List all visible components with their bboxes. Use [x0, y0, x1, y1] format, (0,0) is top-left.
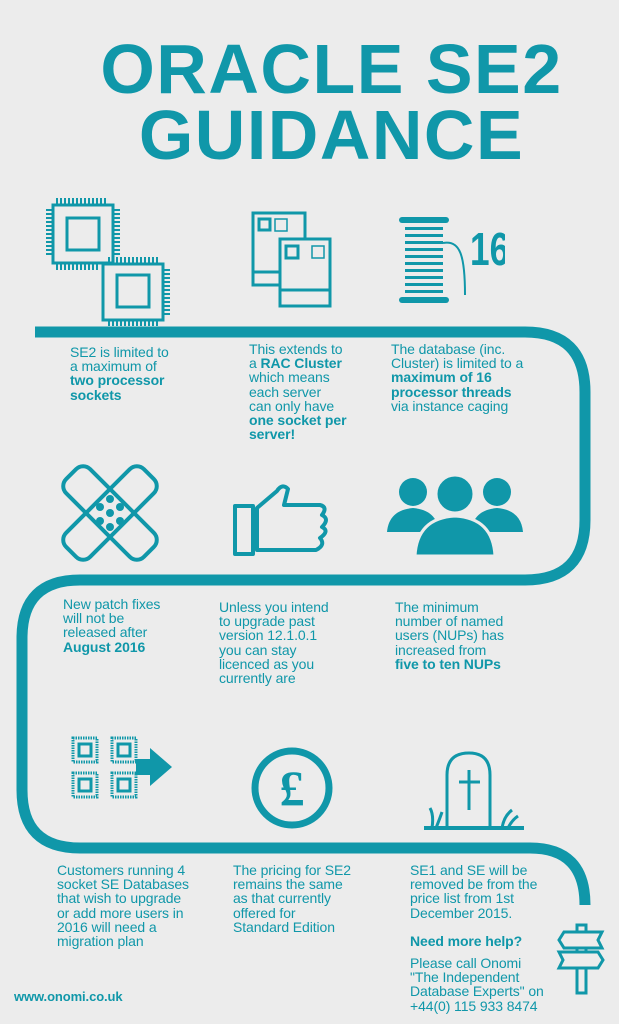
text: upgrade: you can stay: [219, 642, 296, 658]
icon: users: [387, 476, 523, 554]
text: NUPs: increased from: [395, 642, 486, 658]
text: patch: released after: [63, 624, 147, 640]
text: contact: Please call Onomi: [410, 955, 521, 971]
text: migration: [57, 862, 189, 949]
title: GUIDANCE: [139, 96, 524, 174]
text: pricing: [233, 862, 351, 935]
footer url: www.onomi.co.uk: [14, 989, 123, 1004]
text: NUPs: number of named: [395, 613, 503, 629]
text: patch: August 2016: [63, 639, 145, 655]
text: migration: Customers running 4: [57, 862, 185, 878]
text: RAC: each server: [249, 384, 321, 400]
icon: grave: [424, 752, 524, 830]
text: upgrade: currently are: [219, 670, 296, 686]
text: migration: or add more users in: [57, 905, 183, 921]
text: pricing: Standard Edition: [233, 919, 335, 935]
text: pricing: remains the same: [233, 876, 343, 892]
text: sockets: SE2 is limited to: [70, 344, 169, 360]
text: upgrade: [219, 599, 329, 686]
text: RAC: server!: [249, 426, 295, 442]
text: RAC: can only have: [249, 398, 334, 414]
text: threads: Cluster) is limited to a: [391, 355, 523, 371]
title: ORACLE SE2: [100, 30, 563, 108]
text: contact: [410, 955, 544, 1014]
text: upgrade: version 12.1.0.1: [219, 627, 317, 643]
text: migration: that wish to upgrade: [57, 890, 181, 906]
icon: chips arrow: [72, 736, 172, 798]
text: NUPs: five to ten NUPs: [395, 656, 501, 672]
text: migration: socket SE Databases: [57, 876, 189, 892]
text: SE1 removed: SE1 and SE will be: [410, 862, 527, 878]
text: patch: New patch fixes: [63, 596, 160, 612]
icon: servers: [252, 212, 332, 308]
text: NUPs: [395, 599, 504, 672]
icon: pound: [252, 748, 332, 828]
text: RAC: [249, 341, 346, 442]
icon: spool 16: [399, 217, 505, 303]
icon: signpost: [556, 924, 605, 994]
text: pricing: as that currently: [233, 890, 331, 906]
text: RAC: one socket per: [249, 412, 346, 428]
heading: need help: Need more help?: [410, 933, 522, 949]
text: threads: via instance caging: [391, 398, 508, 414]
text: NUPs: users (NUPs) has: [395, 627, 504, 643]
text: RAC: a RAC Cluster: [249, 355, 342, 371]
text: RAC: This extends to: [249, 341, 342, 357]
text: SE1 removed: December 2015.: [410, 905, 512, 921]
text: pricing: offered for: [233, 905, 295, 921]
text: sockets: two processor: [70, 372, 164, 388]
icon: two processors: [46, 198, 170, 326]
text: upgrade: licenced as you: [219, 656, 314, 672]
icon: thumbs up: [233, 484, 328, 556]
text: contact: Database Experts" on: [410, 983, 544, 999]
text: sockets: [70, 344, 169, 403]
icon: bandage: [61, 464, 159, 562]
text: threads: maximum of 16: [391, 369, 492, 385]
text: SE1 removed: removed be from the: [410, 876, 537, 892]
text: threads: [391, 341, 524, 414]
text: upgrade: to upgrade past: [219, 613, 315, 629]
text: patch: will not be: [63, 610, 124, 626]
text: contact: +44(0) 115 933 8474: [410, 998, 537, 1014]
text: RAC: which means: [249, 369, 330, 385]
text: sockets: a maximum of: [70, 358, 157, 374]
text: pricing: The pricing for SE2: [233, 862, 351, 878]
text: SE1 removed: [410, 862, 537, 921]
text: patch: [63, 596, 160, 655]
text: NUPs: The minimum: [395, 599, 479, 615]
title: [100, 30, 563, 174]
icon: pound: £: [280, 760, 304, 816]
text: migration: migration plan: [57, 933, 144, 949]
text: SE1 removed: price list from 1st: [410, 890, 514, 906]
text: threads: The database (inc.: [391, 341, 505, 357]
text: migration: 2016 will need a: [57, 919, 157, 935]
text: upgrade: Unless you intend: [219, 599, 329, 615]
text: threads: processor threads: [391, 384, 511, 400]
text: contact: "The Independent: [410, 969, 519, 985]
text: sockets: sockets: [70, 387, 121, 403]
